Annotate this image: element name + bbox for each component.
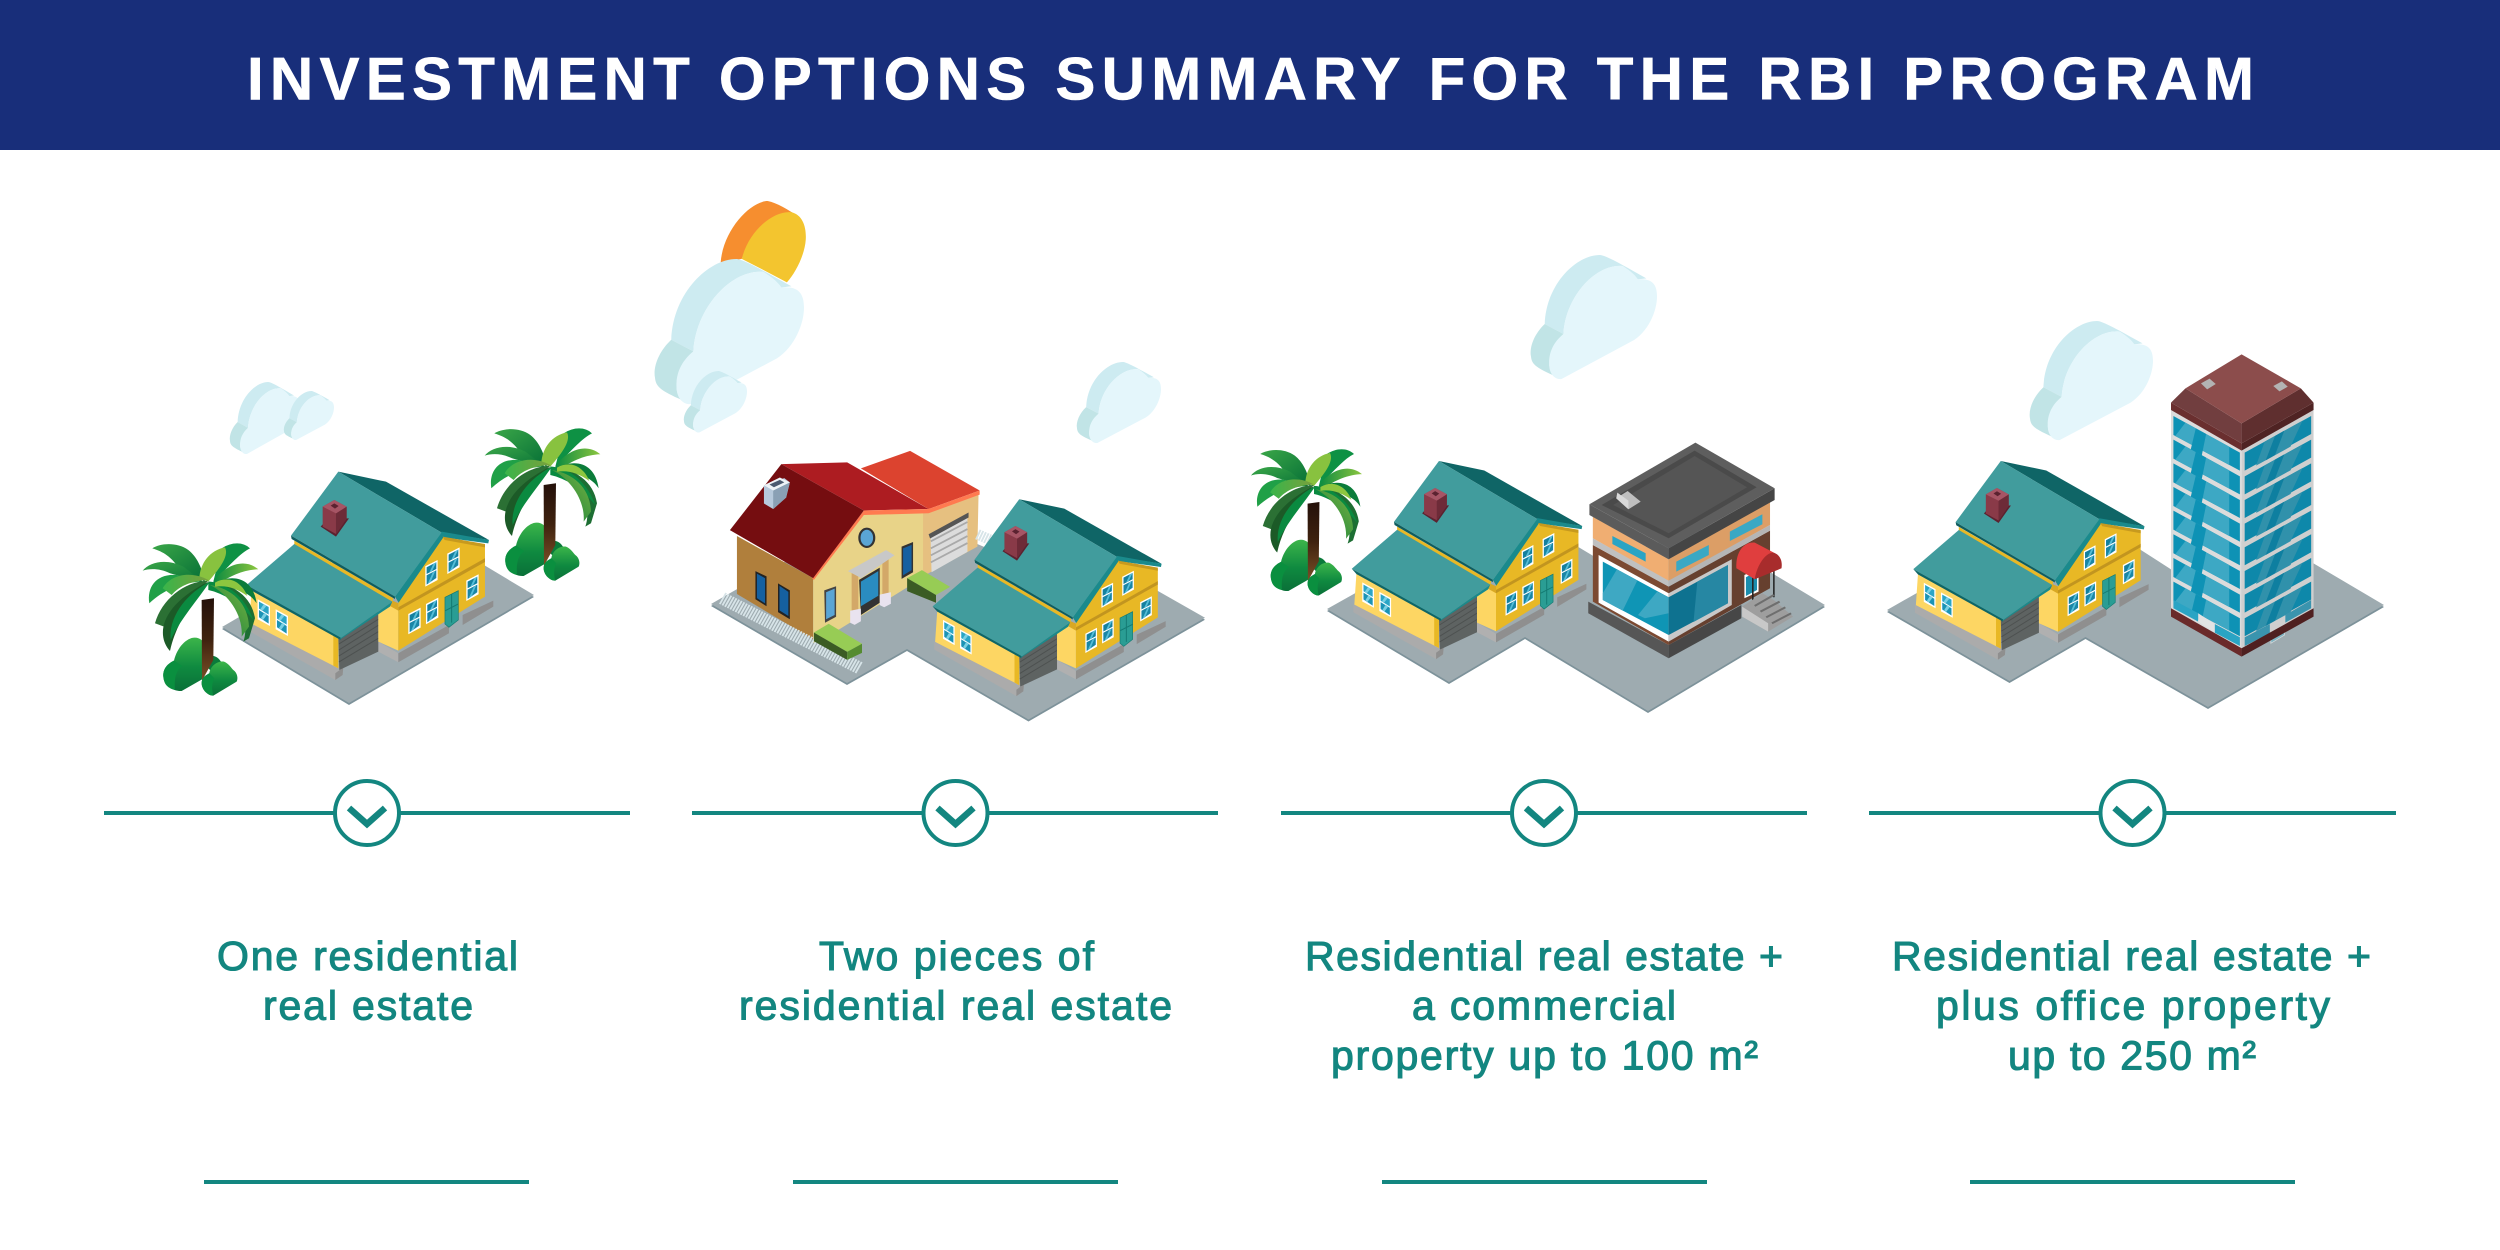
label: residential plus commercial property: Residential real estate + (1305, 933, 1783, 979)
ground plate (222, 519, 534, 705)
column 3 bottom rule (1382, 1180, 1707, 1184)
red-roof house (722, 451, 990, 668)
column 2 divider with chevron (692, 781, 1218, 845)
cloud: small (684, 371, 747, 433)
house (247, 472, 493, 680)
illustration: one house with palm trees (143, 382, 600, 705)
palm tree: left (143, 543, 258, 696)
label: residential plus commercial property: a commercial (1412, 982, 1676, 1028)
palm tree: right (485, 428, 600, 581)
cloud: right (1077, 362, 1161, 443)
column 4 divider with chevron (1869, 781, 2396, 845)
label: residential plus office property: Residential real estate + (1892, 933, 2371, 979)
column 2 bottom rule (793, 1180, 1118, 1184)
column 1 bottom rule (204, 1180, 529, 1184)
column 3 divider with chevron (1281, 781, 1807, 845)
label: two pieces of residential real estate: residential real estate (739, 982, 1172, 1028)
teal-roof house (933, 499, 1166, 696)
column 4 bottom rule (1970, 1180, 2295, 1184)
cloud: large (655, 259, 804, 404)
office tower (2171, 354, 2314, 657)
ground plate (1887, 533, 2384, 709)
sun (721, 201, 806, 282)
cloud (1531, 255, 1657, 379)
cloud: large (230, 382, 300, 454)
label: one residential real estate: One residential (217, 933, 518, 979)
ground plate (711, 543, 1205, 722)
label: residential plus office property: plus office property (1936, 982, 2330, 1028)
label: two pieces of residential real estate: Two pieces of (819, 933, 1095, 979)
palm tree (1251, 449, 1362, 595)
label: one residential real estate: real estate (263, 982, 473, 1028)
house (1352, 461, 1586, 659)
title: INVESTMENT OPTIONS SUMMARY FOR THE RBI PROGRAM (247, 46, 2254, 112)
label: residential plus commercial property: property up to 100 m² (1331, 1032, 1758, 1078)
header banner (0, 0, 2500, 150)
column 1 divider with chevron (104, 781, 630, 845)
cloud: small (284, 391, 334, 440)
illustration: two houses (655, 201, 1205, 722)
illustration: house plus office tower (1887, 321, 2384, 709)
ground plate (1327, 530, 1825, 713)
label: residential plus office property: up to 250 m² (2008, 1032, 2256, 1078)
house (1913, 461, 2149, 660)
cloud (2030, 321, 2153, 440)
illustration: house plus commercial building (1251, 255, 1825, 713)
commercial building (1588, 443, 1793, 658)
